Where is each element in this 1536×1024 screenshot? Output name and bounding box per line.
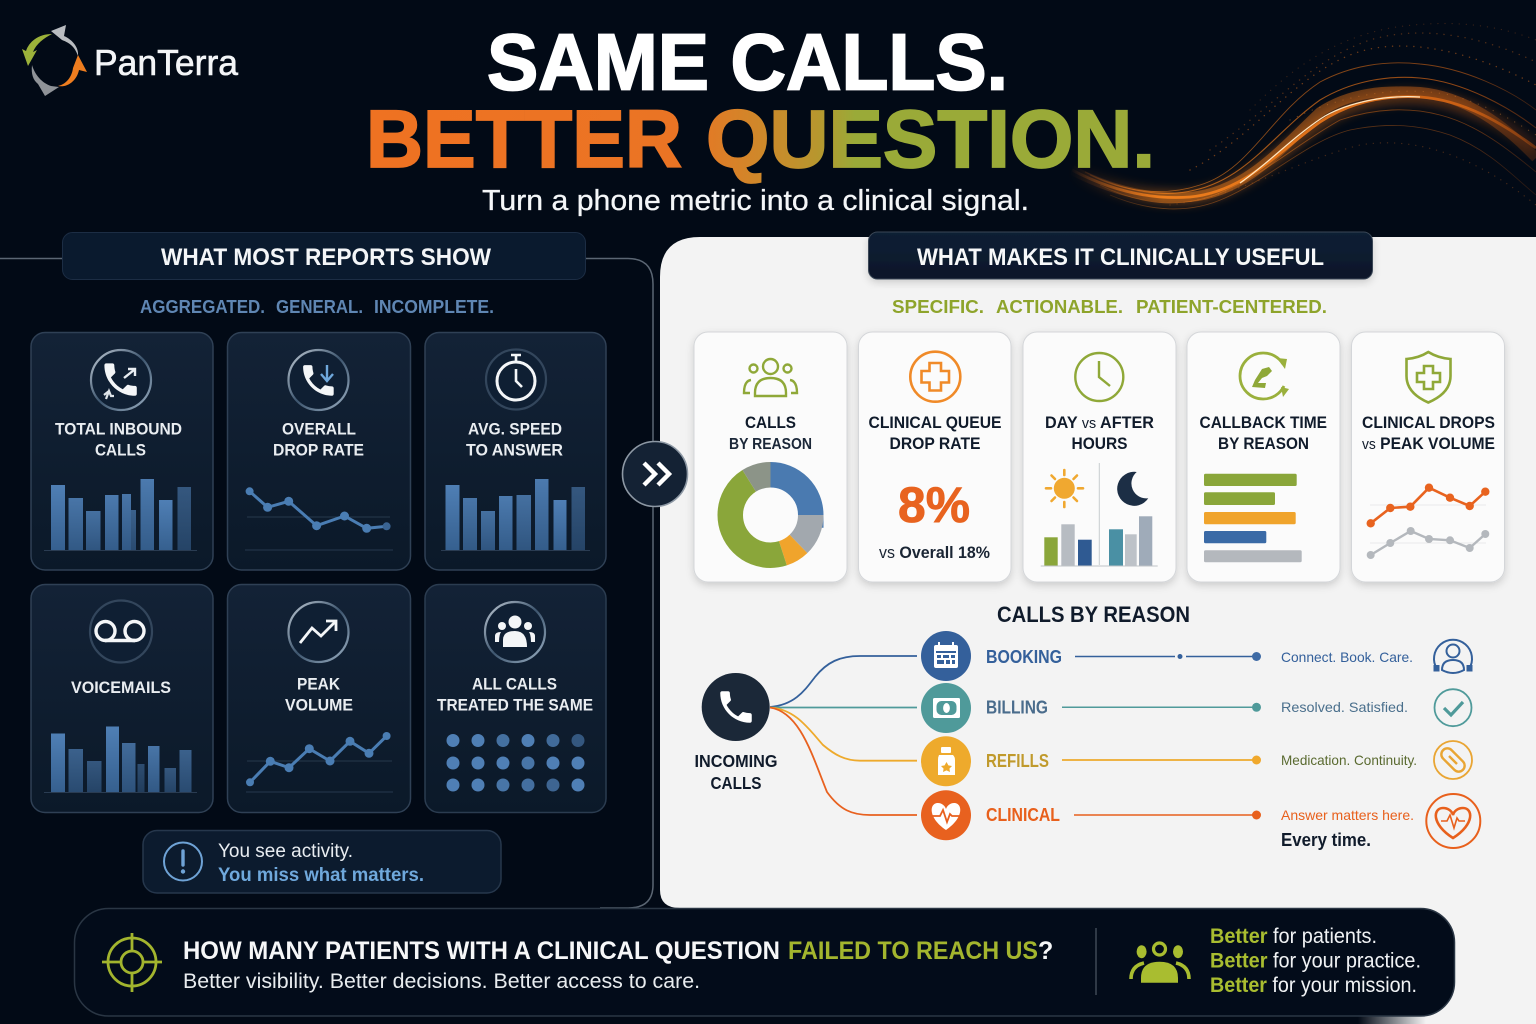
incoming calls label: CALLS bbox=[710, 773, 762, 793]
card: overall drop rate: OVERALL bbox=[282, 420, 356, 438]
header wave graphic bbox=[1072, 24, 1536, 209]
bar chart bbox=[441, 479, 590, 551]
big stat: 8% bbox=[898, 477, 970, 533]
icon: group bbox=[485, 602, 545, 662]
title line 2 bbox=[366, 94, 1155, 185]
title line 2: BETTER bbox=[366, 94, 682, 185]
row: billing: BILLING bbox=[986, 698, 1048, 718]
icon: banknote bbox=[921, 683, 971, 733]
icon: heart ring bbox=[1426, 794, 1480, 848]
icon: heart with pulse bbox=[921, 790, 971, 840]
card: clinical drops vs peak volume: CLINICAL DROPS bbox=[1362, 413, 1495, 432]
card: calls by reason: CALLS bbox=[745, 413, 796, 432]
icon: sun bbox=[1046, 470, 1083, 507]
banner question: HOW MANY PATIENTS WITH A CLINICAL QUESTION bbox=[183, 937, 780, 965]
dot grid bbox=[446, 734, 584, 792]
bottom banner bbox=[74, 908, 1454, 1016]
icon: people outline bbox=[744, 359, 797, 396]
icon: phone with down arrow bbox=[288, 350, 348, 410]
icon: stopwatch bbox=[486, 350, 546, 410]
bar chart: day vs night bbox=[1041, 463, 1158, 566]
horizontal bar chart bbox=[1204, 474, 1302, 562]
card: clinical queue drop rate: CLINICAL QUEUE bbox=[868, 413, 1002, 432]
icon: moon bbox=[1117, 472, 1148, 506]
row: clinical bbox=[921, 790, 1480, 850]
banner benefits: Better for your mission. bbox=[1210, 974, 1417, 997]
arrow button bbox=[622, 442, 688, 506]
card: peak volume bbox=[228, 584, 410, 812]
title line 1: SAME CALLS. bbox=[487, 18, 1008, 106]
subheading: INCOMPLETE. bbox=[374, 296, 494, 317]
card: total inbound calls bbox=[31, 332, 213, 570]
icon: clock bbox=[1075, 353, 1123, 401]
card: clinical drops vs peak volume bbox=[1352, 332, 1504, 582]
heading bar bbox=[62, 232, 586, 280]
panel outline bbox=[0, 258, 653, 908]
panel: what makes it clinically useful (background) bbox=[660, 237, 1536, 1024]
card: calls by reason: BY REASON bbox=[729, 436, 812, 453]
card: day vs after hours: DAY vs AFTER bbox=[1045, 413, 1154, 432]
card: all calls treated the same bbox=[425, 584, 606, 812]
bottom shade strip bbox=[1358, 1016, 1426, 1024]
donut chart bbox=[730, 475, 811, 555]
callout: you miss what matters: You miss what matters. bbox=[218, 865, 424, 886]
banner benefits bbox=[1210, 925, 1421, 997]
card: clinical queue drop rate: DROP RATE bbox=[890, 434, 980, 453]
card: overall drop rate: DROP RATE bbox=[273, 440, 364, 460]
heading bar: WHAT MAKES IT CLINICALLY USEFUL bbox=[917, 244, 1324, 271]
row: refills bbox=[921, 736, 1472, 786]
card: voicemails bbox=[31, 584, 213, 812]
row: clinical: Every time. bbox=[1281, 830, 1371, 850]
icon: capsule bbox=[1434, 741, 1472, 779]
connector curves bbox=[770, 656, 917, 815]
incoming calls node bbox=[702, 673, 770, 741]
card: average speed to answer: AVG. SPEED bbox=[468, 420, 562, 438]
row: booking bbox=[921, 631, 1472, 681]
row: refills: REFILLS bbox=[986, 751, 1049, 771]
heading bar bbox=[868, 232, 1372, 279]
heading: calls by reason: CALLS BY REASON bbox=[997, 602, 1190, 627]
subheading: SPECIFIC. bbox=[892, 296, 984, 317]
card: callback time by reason: CALLBACK TIME bbox=[1200, 413, 1327, 432]
comparison text: vs Overall 18% bbox=[879, 543, 990, 562]
subtitle: Turn a phone metric into a clinical signal. bbox=[482, 185, 1029, 217]
flow diagram: calls by reason bbox=[694, 631, 1480, 850]
card: total inbound calls: CALLS bbox=[95, 440, 146, 460]
card: voicemails: VOICEMAILS bbox=[71, 678, 171, 697]
card: callback time by reason: BY REASON bbox=[1218, 434, 1309, 453]
icon: trending up bbox=[288, 602, 348, 662]
incoming calls label: INCOMING bbox=[694, 751, 778, 771]
icon: medical cross bbox=[910, 352, 960, 402]
banner question: ? bbox=[1038, 937, 1053, 965]
row: refills: Medication. Continuity. bbox=[1281, 752, 1417, 768]
bar chart bbox=[44, 726, 197, 793]
logo: PanTerra bbox=[22, 25, 239, 96]
title line 2: QUESTION. bbox=[706, 94, 1155, 185]
banner benefits: Better for your practice. bbox=[1210, 950, 1421, 972]
icon: calendar bbox=[921, 631, 971, 681]
card: all calls treated the same: ALL CALLS bbox=[472, 674, 557, 694]
incoming calls label bbox=[694, 751, 778, 793]
card: all calls treated the same: TREATED THE SAME bbox=[437, 696, 593, 714]
banner supporting text: Better visibility. Better decisions. Better access to care. bbox=[183, 970, 700, 993]
icon: shield with cross bbox=[1406, 352, 1450, 402]
row: booking: Connect. Book. Care. bbox=[1281, 649, 1413, 665]
subheading: AGGREGATED. bbox=[140, 296, 265, 317]
banner question: FAILED TO REACH US bbox=[788, 937, 1038, 965]
card: peak volume: VOLUME bbox=[285, 696, 353, 714]
banner benefits: Better for patients. bbox=[1210, 925, 1377, 948]
logo mark bbox=[22, 25, 87, 96]
panel: clinically useful content bbox=[694, 232, 1504, 850]
card: calls by reason bbox=[694, 332, 847, 582]
row: booking: BOOKING bbox=[986, 647, 1062, 667]
line chart bbox=[1366, 484, 1490, 559]
icon: person with headset bbox=[1434, 640, 1472, 673]
line chart bbox=[245, 487, 393, 550]
line chart bbox=[246, 732, 393, 792]
card: average speed to answer bbox=[425, 332, 606, 570]
card: overall drop rate bbox=[228, 332, 410, 570]
icon: exclamation bbox=[164, 842, 202, 880]
row: billing bbox=[921, 683, 1472, 733]
heading bar: WHAT MOST REPORTS SHOW bbox=[161, 244, 491, 271]
callout: you miss what matters: You see activity. bbox=[218, 841, 353, 862]
card: day vs after hours: HOURS bbox=[1072, 434, 1128, 453]
card: callback time by reason bbox=[1187, 332, 1340, 582]
bar chart bbox=[44, 479, 197, 551]
row: billing: Resolved. Satisfied. bbox=[1281, 699, 1408, 715]
icon: checkmark bbox=[1434, 689, 1472, 726]
icon: target bbox=[102, 933, 162, 992]
title bbox=[366, 18, 1155, 185]
subheading: GENERAL. bbox=[276, 296, 363, 317]
card: peak volume: PEAK bbox=[297, 674, 341, 694]
card: clinical drops vs peak volume: vs PEAK VOLUME bbox=[1362, 434, 1495, 453]
card: day vs after hours bbox=[1023, 332, 1176, 582]
panel: what most reports show bbox=[0, 232, 653, 908]
card: total inbound calls: TOTAL INBOUND bbox=[55, 420, 182, 438]
row: clinical: Answer matters here. bbox=[1281, 807, 1414, 823]
callout: you miss what matters bbox=[143, 830, 501, 893]
row: clinical: CLINICAL bbox=[986, 805, 1060, 825]
card: average speed to answer: TO ANSWER bbox=[466, 440, 563, 460]
logo wordmark: PanTerra bbox=[94, 42, 239, 83]
icon: callback loop bbox=[1240, 353, 1289, 399]
icon: group bbox=[1131, 943, 1189, 983]
icon: medicine bottle bbox=[921, 736, 971, 786]
subheading: ACTIONABLE. bbox=[996, 296, 1123, 317]
icon: voicemail bbox=[90, 600, 152, 662]
card: clinical queue drop rate bbox=[858, 332, 1011, 582]
subheading bbox=[140, 296, 494, 317]
subheading: PATIENT-CENTERED. bbox=[1136, 296, 1327, 317]
subheading bbox=[892, 296, 1327, 317]
icon: phone with arrows bbox=[91, 350, 151, 410]
